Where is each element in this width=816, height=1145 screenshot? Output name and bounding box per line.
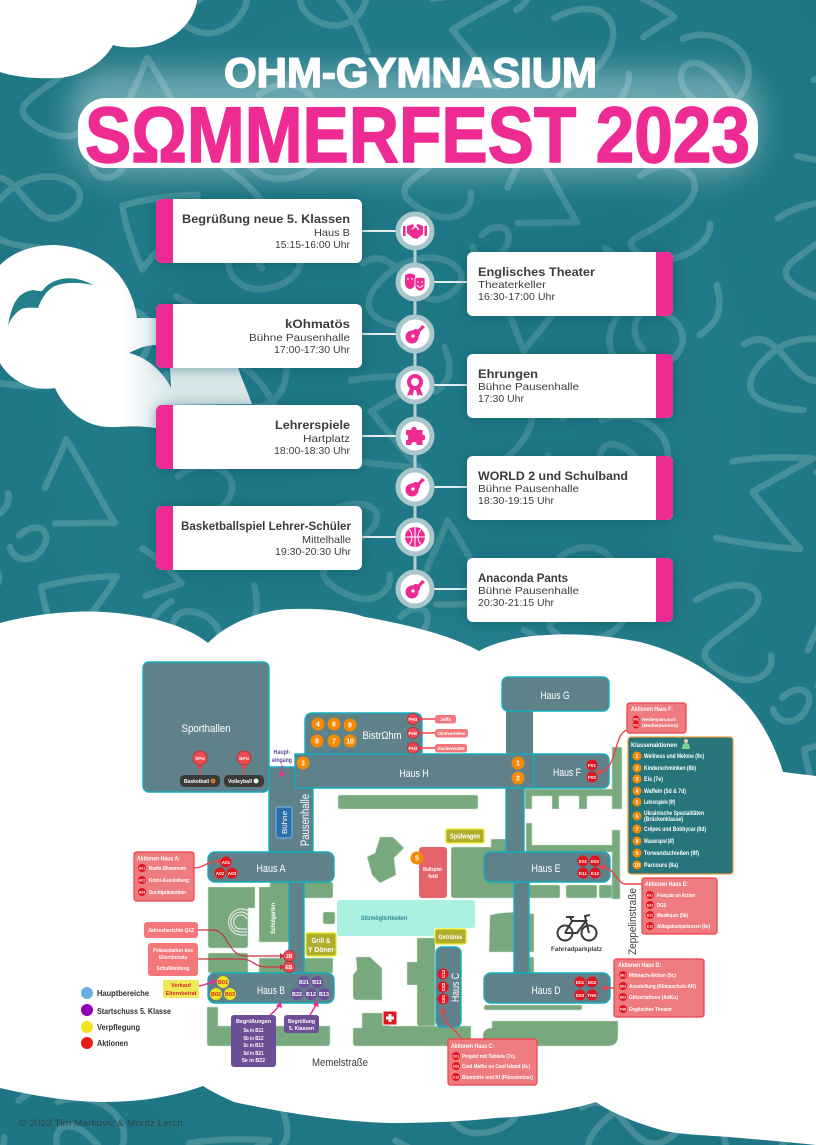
callout: Aktionen Haus A: A02 xyxy=(139,879,145,883)
Verkauf Elternbeirat and yellow markers: B01 xyxy=(218,980,228,986)
panel: Klassenaktionen: Klassenaktionen xyxy=(631,742,677,749)
Verkauf Elternbeirat and yellow markers: Verkauf xyxy=(171,983,191,989)
callout: Aktionen Haus C: C12 xyxy=(453,1076,459,1080)
card: Lehrerspiele xyxy=(156,405,362,469)
callout: Aktionen Haus A: A03 xyxy=(139,891,145,895)
Begrüßungen 5. Klassen and purple markers: 5e in B22 xyxy=(242,1058,265,1064)
callout: Aktionen Haus D: Ausstellung (Klimaschutz-AK) xyxy=(629,984,696,990)
panel: Klassenaktionen: Crêpes und Bobbycar (8d) xyxy=(644,827,706,833)
legend xyxy=(81,987,171,1049)
callout: Aktionen Haus A: A01 xyxy=(139,867,145,871)
card: WORLD 2 und Schulband: 18:30-19:15 Uhr xyxy=(478,495,554,507)
map: green areas xyxy=(207,747,622,1046)
callouts: Jahresberichte und Elternbeirat: JB xyxy=(286,954,293,960)
Begrüßungen 5. Klassen and purple markers: 5b in B12 xyxy=(244,1036,264,1042)
map: Haus B: Haus B xyxy=(257,985,285,997)
panel: Klassenaktionen: Ukrainische Spezialitäten xyxy=(644,811,704,817)
cloud: middle left xyxy=(0,245,252,428)
panel: Klassenaktionen: Wasserspiel (8f) xyxy=(644,839,674,845)
timeline connectors xyxy=(362,231,467,589)
callout: Aktionen Haus D: THK xyxy=(587,993,597,998)
panel: Klassenaktionen: Parcours (8a) xyxy=(644,863,678,869)
copyright: © 2023 Tim Markovic & Moritz Lerch xyxy=(19,1118,183,1128)
title glow xyxy=(70,70,760,175)
map: orange numbered markers: 8 xyxy=(315,738,319,746)
map: Haus E: Haus E xyxy=(532,863,560,875)
Sporthallen actions xyxy=(180,751,264,787)
map: orange numbered markers: 2 xyxy=(516,776,520,782)
BistrOhm actions: Obstverteilen xyxy=(438,731,466,736)
callout: Aktionen Haus D: D01 xyxy=(576,980,585,985)
map: Sitzmöglichkeiten xyxy=(337,900,475,936)
callouts: Jahresberichte und Elternbeirat: Präsentation des xyxy=(153,948,193,954)
BistrOhm actions: PH3 xyxy=(409,746,418,751)
Begrüßungen 5. Klassen and purple markers: 5a in B11 xyxy=(244,1028,264,1034)
callout: Aktionen Haus C: C01 xyxy=(441,994,446,1003)
callout: Aktionen Haus E: E02 xyxy=(647,904,653,908)
panel: Klassenaktionen: 10 xyxy=(634,863,640,869)
card: Basketballspiel Lehrer-Schüler xyxy=(156,506,362,570)
Begrüßungen 5. Klassen and purple markers: B11 xyxy=(312,980,322,986)
card: Lehrerspiele: 18:00-18:30 Uhr xyxy=(274,445,350,457)
Verkauf Elternbeirat and yellow markers: B03 xyxy=(225,992,235,998)
map: building Sporthallen xyxy=(143,662,269,792)
icon: guitar xyxy=(398,317,432,351)
callout: Aktionen Haus D: D02 xyxy=(620,985,626,989)
Begrüßungen 5. Klassen and purple markers: B13 xyxy=(319,992,329,998)
icon: theatre masks xyxy=(398,265,432,299)
label: Grill und Döner: Y Döner xyxy=(308,945,334,954)
card: kOhmatös: Bühne Pausenhalle xyxy=(249,332,350,344)
map: Haus H xyxy=(295,754,534,788)
cloud: lower white map area xyxy=(0,609,816,1145)
Sporthallen actions: Volleyball xyxy=(228,779,252,785)
map: Haus F xyxy=(534,754,609,788)
Begrüßungen 5. Klassen and purple markers: Begrüßungen xyxy=(236,1019,271,1025)
panel: Klassenaktionen: 6 xyxy=(636,814,639,820)
Begrüßungen 5. Klassen and purple markers xyxy=(231,976,330,1067)
map: corridors xyxy=(289,711,533,974)
card: kOhmatös xyxy=(156,304,362,368)
Begrüßungen 5. Klassen and purple markers: B12 xyxy=(306,992,316,998)
card: Ehrungen: Ehrungen xyxy=(478,369,538,381)
map: Haus D: Haus D xyxy=(532,985,561,997)
card: kOhmatös: 17:00-17:30 Uhr xyxy=(274,344,350,356)
callout: Aktionen Haus A: A03 xyxy=(228,871,237,876)
BistrOhm actions: PH1 xyxy=(409,717,418,722)
card: WORLD 2 und Schulband: WORLD 2 und Schulband xyxy=(478,471,628,483)
Begrüßungen 5. Klassen and purple markers: B22 xyxy=(292,992,302,998)
map: Ballspielfeld: feld xyxy=(428,874,438,880)
card: Englisches Theater: Theaterkeller xyxy=(478,279,547,291)
callout: Aktionen Haus A: A01 xyxy=(222,860,231,865)
label: Getränke: Getränke xyxy=(438,934,463,941)
panel: Klassenaktionen: 5 xyxy=(636,800,639,806)
callout: Aktionen Haus E: DGS xyxy=(657,903,666,909)
Sporthallen actions: SPw xyxy=(195,756,205,761)
map: Haus F: Haus F xyxy=(553,767,581,779)
card: WORLD 2 und Schulband xyxy=(467,456,673,520)
BistrOhm actions: Jaffa xyxy=(440,717,451,722)
Begrüßungen 5. Klassen and purple markers: 5d in B21 xyxy=(244,1051,264,1057)
card: Basketballspiel Lehrer-Schüler: 19:30-20:30 Uhr xyxy=(275,546,351,558)
map: running track icon xyxy=(229,909,251,935)
callout: Aktionen Haus A: Suchtprävention xyxy=(149,890,187,896)
panel: Klassenaktionen: 8 xyxy=(636,839,639,845)
icon: guitar xyxy=(398,470,432,504)
callout: Aktionen Haus E: Français en Action xyxy=(657,893,695,899)
callout: Aktionen Haus F: F02 xyxy=(633,724,639,728)
map: orange numbered markers xyxy=(296,718,524,864)
callouts: Jahresberichte und Elternbeirat: EB xyxy=(286,965,293,971)
callout: Aktionen Haus D: Mitmach-Aktion (5c) xyxy=(629,973,676,979)
card: Englisches Theater: Englisches Theater xyxy=(478,267,596,279)
Haupteingang label and arrow: Haupt- xyxy=(274,750,290,756)
map: Schulgarten label: Schulgarten xyxy=(270,903,277,934)
map: Bühne xyxy=(276,807,292,838)
icon: basketball xyxy=(398,520,432,554)
card: Ehrungen: 17:30 Uhr xyxy=(478,393,524,405)
map: Haus G: Haus G xyxy=(540,690,570,702)
card: Englisches Theater: 16:30-17:00 Uhr xyxy=(478,291,556,303)
callout: Aktionen Haus A: Krimi-Ausstellung xyxy=(149,878,189,884)
panel: Klassenaktionen: 1 xyxy=(636,754,639,760)
callout: Aktionen Haus E xyxy=(578,856,717,934)
Begrüßungen 5. Klassen and purple markers: B21 xyxy=(299,980,309,986)
map: Haus H: Haus H xyxy=(400,768,429,780)
map: Ballspielfeld: Ballspiel- xyxy=(423,867,443,873)
callouts: Jahresberichte und Elternbeirat: Jahresberichte Q12 xyxy=(148,928,194,934)
callout: Aktionen Haus C: C12 xyxy=(441,969,446,978)
card: Basketballspiel Lehrer-Schüler: Mittelhalle xyxy=(302,534,351,546)
card: Anaconda Pants xyxy=(467,558,673,622)
street label: Zeppelinstraße: Zeppelinstraße xyxy=(627,888,639,955)
BistrOhm actions xyxy=(408,714,468,754)
map: Eingang und Pausenhalle xyxy=(269,767,313,852)
icon: bicycle with label: Fahrradparkplatz xyxy=(551,946,603,953)
Begrüßungen 5. Klassen and purple markers: 5. Klassen xyxy=(289,1026,314,1032)
label: Spülwagen: Spülwagen xyxy=(450,834,480,840)
label: Getränke xyxy=(435,929,466,944)
callout: Aktionen Haus E: E12 xyxy=(591,871,600,876)
Sporthallen actions: SPo xyxy=(239,756,249,761)
Sporthallen actions: Basketball xyxy=(184,779,209,785)
callout: Aktionen Haus F: F02 xyxy=(588,775,596,780)
map: orange numbered markers: 9 xyxy=(348,722,352,730)
Haupteingang label and arrow xyxy=(272,750,292,778)
callout: Aktionen Haus F xyxy=(586,703,686,782)
panel: Klassenaktionen: Wellness und Melone (9c) xyxy=(644,754,704,760)
panel: Klassenaktionen: 4 xyxy=(636,789,639,795)
map: Haus B xyxy=(208,973,334,1003)
card: Lehrerspiele: Hartplatz xyxy=(303,433,350,445)
panel: Klassenaktionen: Eis (7e) xyxy=(644,777,663,783)
Begrüßungen 5. Klassen and purple markers: Begrüßung xyxy=(288,1019,315,1025)
callout: Aktionen Haus D xyxy=(574,959,704,1017)
panel: Klassenaktionen: 7 xyxy=(636,827,639,833)
callout: Aktionen Haus C: Biometrie und KI (Plusseminar) xyxy=(462,1075,533,1081)
map: building BistrOhm xyxy=(305,713,422,755)
callout: Aktionen Haus D: Aktionen Haus D: xyxy=(618,963,661,969)
map: orange numbered markers: 6 xyxy=(332,722,336,728)
callout: Aktionen Haus E: Aktionen Haus E: xyxy=(645,882,688,888)
map: Haus E xyxy=(484,852,610,882)
callout: Aktionen Haus C: Cool Maths on Cool Island (6c) xyxy=(462,1064,530,1070)
card: Begrüßung neue 5. Klassen: Begrüßung neue 5. Klassen xyxy=(182,214,350,226)
card: Basketballspiel Lehrer-Schüler: Basketballspiel Lehrer-Schüler xyxy=(181,521,352,533)
callout: Aktionen Haus E: E01 xyxy=(647,894,653,898)
callout: Aktionen Haus E: E01 xyxy=(579,859,588,864)
callout: Aktionen Haus F: Aktionen Haus F: xyxy=(631,707,673,713)
label: Grill und Döner xyxy=(306,933,336,956)
card: Anaconda Pants: 20:30-21:15 Uhr xyxy=(478,597,554,609)
card: kOhmatös: kOhmatös xyxy=(285,319,350,331)
title: Ohm-Gymnasium: OHM-GYMNASIUM xyxy=(224,49,597,96)
map: Haus C: Haus C xyxy=(450,973,462,1002)
panel: Klassenaktionen: 3 xyxy=(636,777,639,783)
panel: Klassenaktionen: (Brückenklasse) xyxy=(644,817,683,823)
cloud: top left xyxy=(0,0,197,78)
label: Grill und Döner: Grill & xyxy=(312,936,331,945)
icon: bicycle with label xyxy=(551,915,603,953)
map: Ballspielfeld xyxy=(419,847,447,898)
panel: Klassenaktionen: Lehrerspiele (9f) xyxy=(644,800,675,806)
icon: rosette xyxy=(398,368,432,402)
icon: puzzle piece xyxy=(398,419,432,453)
callout: Aktionen Haus D: D03 xyxy=(620,996,626,1000)
card: Begrüßung neue 5. Klassen xyxy=(156,199,362,263)
card: Ehrungen: Bühne Pausenhalle xyxy=(478,381,579,393)
BistrOhm actions: PH2 xyxy=(409,731,418,736)
callout: Aktionen Haus C: Aktionen Haus C: xyxy=(451,1044,494,1050)
map: Haus A: Haus A xyxy=(256,863,286,875)
Haupteingang label and arrow: eingang xyxy=(272,758,292,764)
callout: Aktionen Haus E: E11 xyxy=(579,871,587,876)
callout: Aktionen Haus F: (Medientutoren) xyxy=(642,723,678,729)
street label: Memelstraße: Memelstraße xyxy=(312,1057,368,1069)
Verkauf Elternbeirat and yellow markers xyxy=(163,976,236,1000)
card: Begrüßung neue 5. Klassen: Haus B xyxy=(314,227,350,239)
card: Englisches Theater xyxy=(467,252,673,316)
callouts: Jahresberichte und Elternbeirat: Schulkleidung xyxy=(156,966,190,972)
callouts: Jahresberichte und Elternbeirat xyxy=(144,922,294,976)
Verkauf Elternbeirat and yellow markers: Elternbeirat xyxy=(166,991,197,997)
card: Ehrungen xyxy=(467,354,673,418)
callout: Aktionen Haus E: E12 xyxy=(647,925,653,929)
callout: Aktionen Haus C: C02 xyxy=(441,982,446,991)
callout: Aktionen Haus D: D03 xyxy=(576,993,585,998)
card: Anaconda Pants: Anaconda Pants xyxy=(478,573,568,585)
map: Eingang und Pausenhalle: Pausenhalle xyxy=(300,794,312,846)
callout: Aktionen Haus A: A02 xyxy=(216,871,225,876)
map: orange numbered markers: 3 xyxy=(301,760,305,768)
callout: Aktionen Haus F: F01 xyxy=(633,718,639,722)
callout: Aktionen Haus C: C02 xyxy=(453,1065,459,1069)
map: Bühne: Bühne xyxy=(280,811,289,834)
callout: Aktionen Haus E: Musikquiz (5b) xyxy=(657,913,688,919)
map: orange numbered markers: 4 xyxy=(316,722,320,728)
panel: Klassenaktionen: Torwandschießen (9f) xyxy=(644,851,699,857)
map: orange numbered markers: 1 xyxy=(516,760,520,768)
panel: Klassenaktionen: 9 xyxy=(636,851,639,857)
map: Haus C xyxy=(436,947,462,1027)
callout: Aktionen Haus A xyxy=(134,852,238,901)
callout: Aktionen Haus C xyxy=(438,968,537,1085)
callout: Aktionen Haus D: D01 xyxy=(620,974,626,978)
callout: Aktionen Haus F: F01 xyxy=(588,763,596,768)
map: building BistrOhm: BistrΩhm xyxy=(362,730,402,742)
callout: Aktionen Haus E: E11 xyxy=(647,914,653,918)
legend: Hauptbereiche xyxy=(97,988,149,998)
map: orange numbered markers: 5 xyxy=(415,856,419,862)
callout: Aktionen Haus E: Alltagskompetenzen (6e) xyxy=(657,924,710,930)
callout: Aktionen Haus A: Aktionen Haus A: xyxy=(137,856,180,862)
panel: Klassenaktionen: Kinderschminken (8b) xyxy=(644,766,696,772)
callout: Aktionen Haus E: E02 xyxy=(591,859,600,864)
callout: Aktionen Haus D: D02 xyxy=(588,980,597,985)
callout: Aktionen Haus C: C01 xyxy=(453,1055,459,1059)
callout: Aktionen Haus F: Medienparcours xyxy=(642,717,676,723)
Begrüßungen 5. Klassen and purple markers: 5c in B13 xyxy=(244,1043,264,1049)
card: WORLD 2 und Schulband: Bühne Pausenhalle xyxy=(478,483,579,495)
callouts: Jahresberichte und Elternbeirat: Elternbeirats xyxy=(159,955,187,961)
Verkauf Elternbeirat and yellow markers: B02 xyxy=(211,992,221,998)
callout: Aktionen Haus A: Radio-Showroom xyxy=(149,866,186,872)
card: Lehrerspiele: Lehrerspiele xyxy=(275,420,350,432)
icon: first aid cross xyxy=(383,1011,397,1025)
callout: Aktionen Haus D: Glitzertattoos (AdKu) xyxy=(629,995,678,1001)
icon: guitar xyxy=(398,572,432,606)
callout: Aktionen Haus D: THK xyxy=(619,1008,627,1012)
legend: Startschuss 5. Klasse xyxy=(97,1006,171,1016)
map: Haus A xyxy=(208,852,334,882)
card: Begrüßung neue 5. Klassen: 15:15-16:00 Uhr xyxy=(275,239,350,251)
callout: Aktionen Haus C: Projekt mit Tablets (7c) xyxy=(462,1054,515,1060)
label: Spülwagen xyxy=(446,829,484,843)
map: Sitzmöglichkeiten: Sitzmöglichkeiten xyxy=(361,915,407,922)
map: orange numbered markers: 10 xyxy=(346,738,354,746)
panel: Klassenaktionen: Waffeln (5d & 7d) xyxy=(644,789,686,795)
callout: Aktionen Haus D: Englisches Theater xyxy=(629,1007,673,1013)
map: orange numbered markers: 7 xyxy=(332,738,336,746)
panel: Klassenaktionen: 2 xyxy=(636,766,639,772)
legend: Aktionen xyxy=(97,1038,128,1048)
map: Haus D xyxy=(484,973,610,1003)
BistrOhm actions: Zuckerwatte xyxy=(438,746,465,751)
icon: handshake xyxy=(398,214,432,248)
legend: Verpflegung xyxy=(97,1022,140,1032)
map: Haus G xyxy=(502,677,609,711)
panel: Klassenaktionen xyxy=(628,737,733,874)
map: building Sporthallen: Sporthallen xyxy=(182,723,230,735)
card: Anaconda Pants: Bühne Pausenhalle xyxy=(478,585,579,597)
